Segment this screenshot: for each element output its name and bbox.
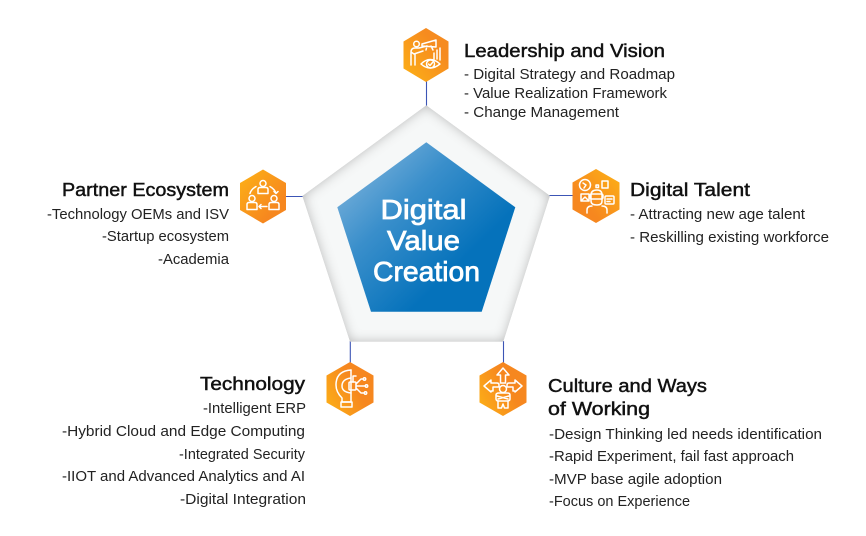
text block: technology: -IIOT and Advanced Analytics and AI bbox=[62, 468, 305, 485]
connector lines bbox=[286, 80, 574, 364]
text block: partner ecosystem bbox=[47, 180, 230, 268]
text block: digital talent: Digital Talent bbox=[630, 180, 750, 200]
text block: technology: -Integrated Security bbox=[179, 446, 305, 463]
text block: technology: -Digital Integration bbox=[180, 491, 306, 508]
text block: partner ecosystem: -Academia bbox=[158, 251, 230, 268]
text block: digital talent bbox=[630, 180, 829, 246]
text block: culture and ways of working: -Design Thinking led needs identification bbox=[549, 426, 822, 443]
text block: technology: -Hybrid Cloud and Edge Computing bbox=[62, 423, 305, 440]
text block: leadership and vision bbox=[464, 41, 675, 121]
text block: partner ecosystem: -Technology OEMs and ISV bbox=[47, 206, 229, 223]
text block: partner ecosystem: -Startup ecosystem bbox=[102, 228, 229, 245]
center title: Creation bbox=[373, 256, 480, 287]
text block: culture and ways of working: of Working bbox=[548, 399, 650, 419]
text block: technology: Technology bbox=[200, 374, 305, 394]
text block: culture and ways of working: Culture and Ways bbox=[548, 376, 707, 396]
text block: culture and ways of working: -Rapid Experiment, fail fast approach bbox=[549, 448, 794, 465]
text block: partner ecosystem: Partner Ecosystem bbox=[62, 180, 229, 200]
icon: digital talent hexagon bbox=[572, 169, 620, 223]
icon: partner ecosystem hexagon bbox=[240, 170, 286, 224]
text block: technology: -Intelligent ERP bbox=[203, 400, 306, 417]
text block: leadership and vision: - Digital Strategy and Roadmap bbox=[464, 66, 675, 83]
inner blue pentagon with title bbox=[337, 142, 515, 312]
text block: digital talent: - Attracting new age talent bbox=[630, 206, 806, 223]
text block: leadership and vision: - Change Management bbox=[464, 104, 620, 121]
text block: culture and ways of working: -Focus on Experience bbox=[549, 493, 690, 510]
icon: culture hexagon bbox=[480, 362, 526, 416]
text block: leadership and vision: - Value Realization Framework bbox=[464, 85, 667, 102]
outer grey pentagon bbox=[300, 103, 552, 344]
text block: digital talent: - Reskilling existing workforce bbox=[630, 229, 829, 246]
text block: technology bbox=[62, 374, 306, 508]
icon: leadership hexagon bbox=[404, 28, 448, 82]
center title: Value bbox=[387, 225, 460, 256]
text block: culture and ways of working: -MVP base agile adoption bbox=[549, 471, 722, 488]
center title bbox=[373, 194, 480, 287]
icon: technology hexagon bbox=[326, 362, 374, 416]
center title: Digital bbox=[380, 194, 466, 225]
text block: leadership and vision: Leadership and Vision bbox=[464, 41, 665, 61]
text block: culture and ways of working bbox=[548, 376, 822, 510]
